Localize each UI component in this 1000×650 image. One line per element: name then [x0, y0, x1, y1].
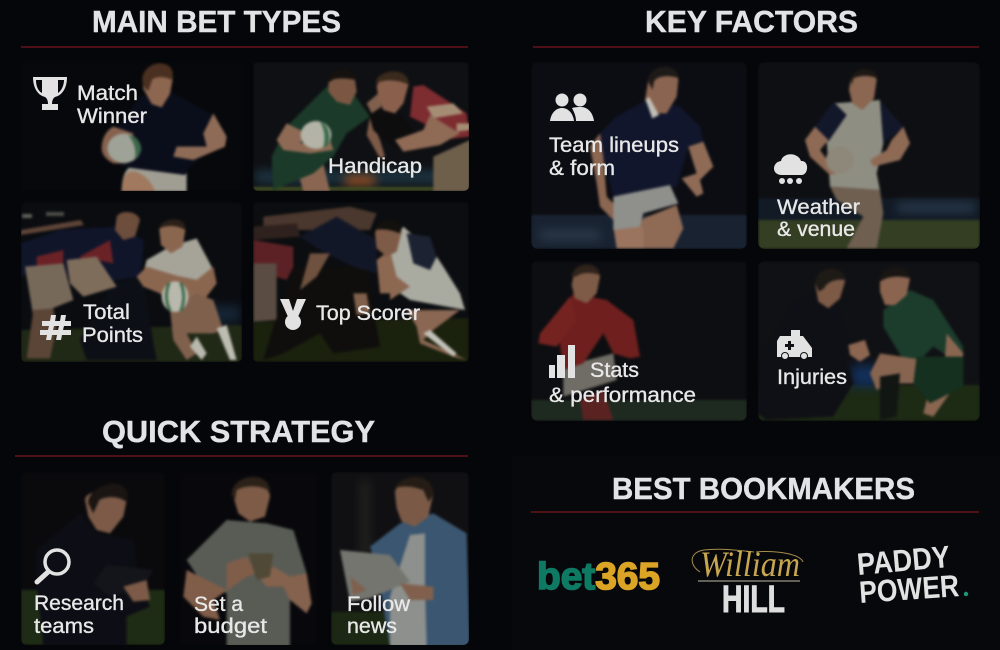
label: set a budget — [194, 593, 267, 638]
label: team lineups and form — [549, 134, 679, 180]
icon: medal — [280, 299, 306, 330]
label: research teams — [34, 592, 124, 638]
label: injuries: Injuries — [777, 366, 847, 389]
label: stats and performance: Stats — [590, 359, 639, 382]
panel: main bet types — [21, 4, 470, 362]
icon: trophy — [33, 77, 67, 110]
label: top scorer: Top Scorer — [316, 302, 420, 325]
label: total points — [82, 301, 143, 347]
logo: paddy power: PADDY — [856, 539, 952, 582]
label: match winner: Match — [77, 82, 138, 105]
label: follow news: Follow — [347, 593, 411, 616]
panel: key factors — [531, 4, 980, 421]
label: stats and performance: & performance — [549, 384, 696, 407]
card: total points — [21, 202, 242, 362]
label: follow news — [347, 593, 411, 638]
card: research teams — [21, 472, 165, 647]
label: research teams: teams — [34, 615, 94, 638]
logo: william hill — [692, 544, 803, 621]
label: match winner — [77, 82, 147, 128]
label: set a budget: budget — [194, 615, 267, 638]
heading: quick strategy: QUICK STRATEGY — [102, 414, 375, 449]
heading: best bookmakers: BEST BOOKMAKERS — [612, 471, 915, 506]
label: total points: Total — [83, 301, 130, 324]
label: match winner: Winner — [77, 105, 147, 128]
icon: rain cloud — [774, 154, 807, 184]
heading: key factors: KEY FACTORS — [645, 4, 858, 39]
card: stats and performance — [531, 261, 747, 421]
icon: magnifier — [37, 550, 69, 582]
label: stats and performance — [549, 359, 696, 407]
icon: ambulance — [777, 330, 812, 360]
logo: paddy power: POWER — [858, 568, 960, 610]
panel: quick strategy — [15, 414, 470, 647]
label: team lineups and form: & form — [549, 157, 615, 180]
logo: william hill: William — [700, 544, 800, 584]
card: follow news — [331, 472, 470, 647]
label: team lineups and form: Team lineups — [549, 134, 679, 157]
logo: bet365: bet365 — [537, 556, 660, 598]
card: set a budget — [180, 472, 318, 647]
label: total points: Points — [82, 324, 143, 347]
logo: william hill: HILL — [722, 579, 785, 621]
icon: bar chart — [549, 345, 575, 378]
card: handicap — [253, 62, 470, 192]
panel: best bookmakers — [512, 456, 1000, 650]
card: team lineups and form — [531, 62, 747, 249]
label: weather and venue: & venue — [777, 218, 855, 241]
label: research teams: Research — [34, 592, 124, 615]
card: injuries — [753, 261, 980, 421]
label: follow news: news — [347, 615, 397, 638]
icon: hash — [40, 315, 71, 340]
label: handicap: Handicap — [328, 155, 422, 178]
card: weather and venue — [758, 62, 980, 249]
card: match winner — [33, 62, 228, 191]
heading: main bet types: MAIN BET TYPES — [92, 4, 341, 39]
label: weather and venue: Weather — [777, 196, 860, 219]
icon: team users — [550, 94, 594, 121]
logo: paddy power — [856, 539, 968, 610]
label: set a budget: Set a — [194, 593, 243, 616]
card: top scorer — [253, 202, 469, 362]
label: weather and venue — [777, 196, 860, 241]
